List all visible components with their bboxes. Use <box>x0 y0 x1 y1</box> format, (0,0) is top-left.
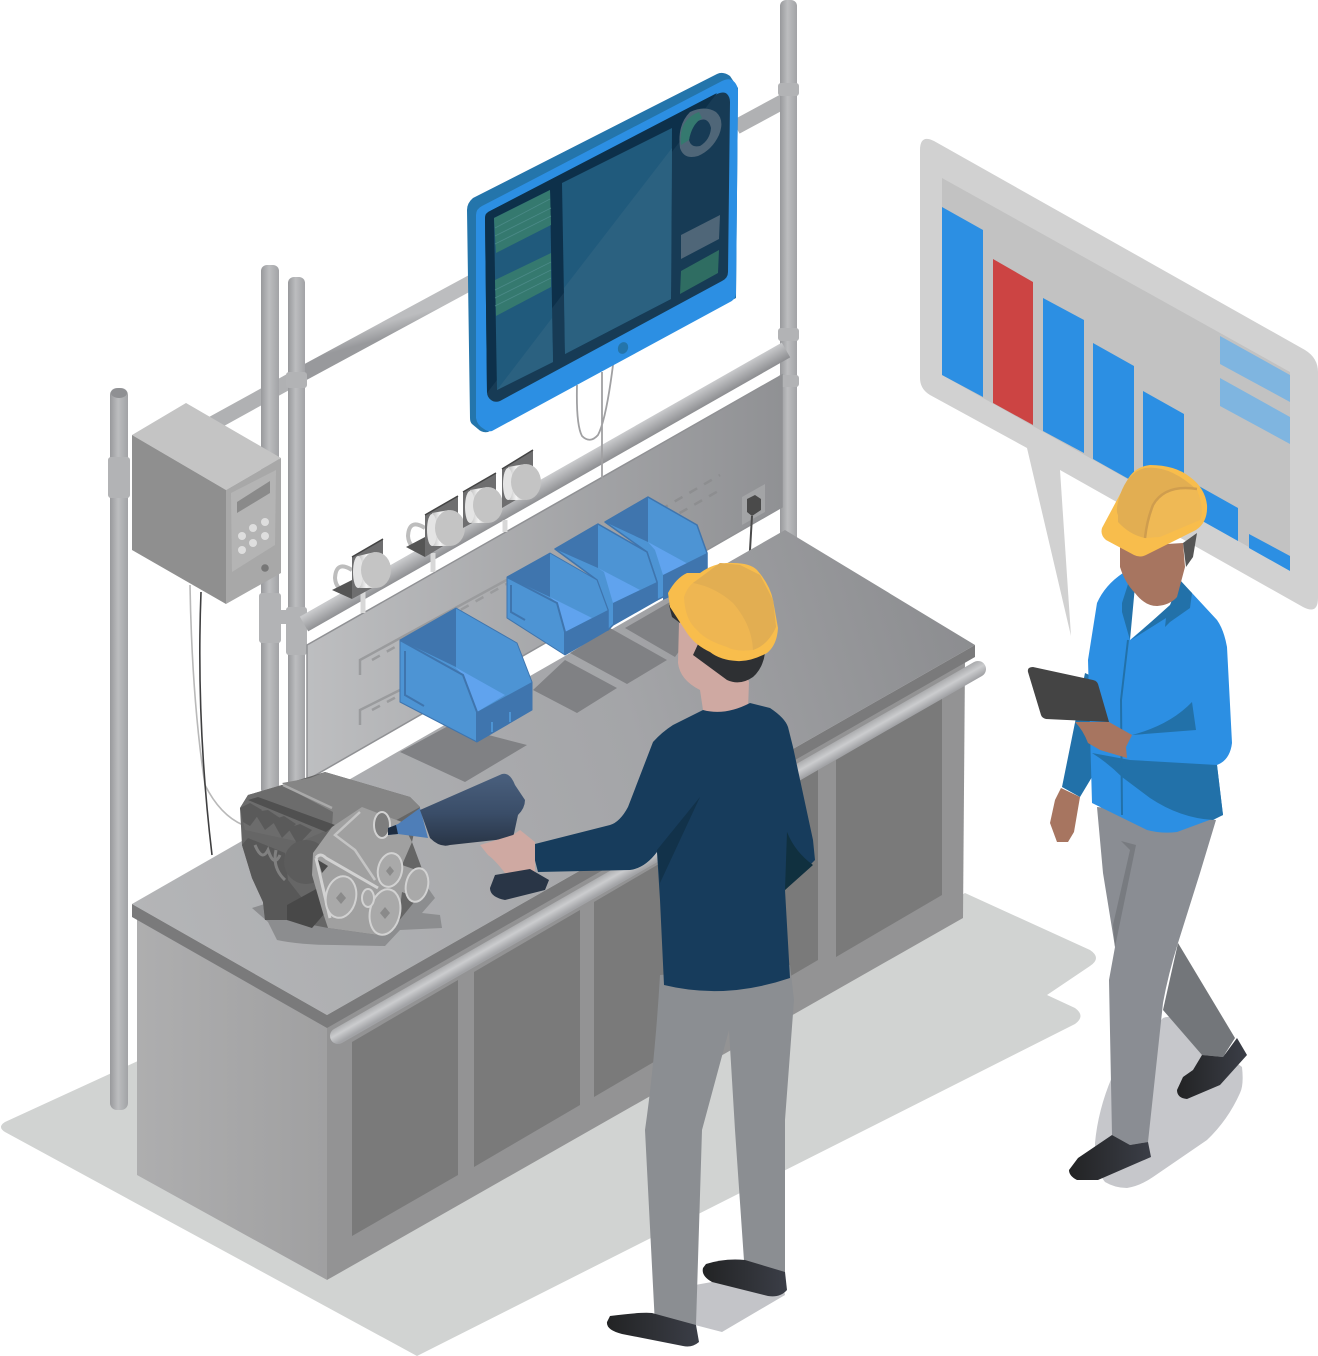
engine dark stripe <box>248 797 335 832</box>
bin 3 <box>555 524 657 630</box>
engine shadow <box>252 880 442 946</box>
engine block <box>240 772 442 946</box>
jacket seam <box>1121 640 1128 815</box>
engine dark recess <box>318 860 328 873</box>
floor shadow <box>1 893 1096 1356</box>
head <box>1120 543 1185 606</box>
neck and head <box>678 622 749 714</box>
torso <box>531 703 815 991</box>
box left face <box>132 435 226 604</box>
bin 1 <box>400 608 532 742</box>
screen: left column <box>494 190 553 390</box>
keypad panel <box>231 470 276 572</box>
legend swatch 1 <box>1220 336 1290 402</box>
jacket <box>1088 573 1232 833</box>
engine highlight bar <box>283 785 332 808</box>
bar: blue 1 <box>942 207 983 397</box>
shoe front <box>607 1313 699 1346</box>
instrument 2 <box>406 496 465 557</box>
cabinet door 4 <box>712 770 818 1022</box>
pulley hubs <box>336 866 394 919</box>
torso shade arm <box>657 797 700 883</box>
shelf pipe <box>304 350 786 624</box>
screen: left column highlight <box>497 318 553 390</box>
screen: green block 1 <box>494 190 551 253</box>
engine back cover <box>282 772 420 840</box>
shoe front <box>1069 1135 1151 1180</box>
box top <box>132 403 281 490</box>
bar: red <box>993 259 1033 425</box>
shoe rear <box>1177 1038 1247 1099</box>
cabinet door 5 <box>836 698 942 957</box>
speech panel: performance dashboard <box>920 139 1318 636</box>
hair <box>669 605 765 682</box>
engine belt <box>316 855 378 918</box>
collar <box>1122 578 1192 640</box>
scanner <box>388 774 549 900</box>
engine coil row <box>240 803 312 845</box>
screen: main panel highlight <box>564 148 672 354</box>
box right face <box>226 458 281 604</box>
scanner body <box>420 774 525 846</box>
instruments on shelf <box>332 450 541 613</box>
wall outlet and plug <box>742 484 765 566</box>
shirt <box>1128 586 1177 640</box>
engine silhouette <box>240 772 428 935</box>
bench left face <box>137 918 327 1280</box>
instrument 3 <box>463 473 503 528</box>
hair <box>1183 533 1197 567</box>
cabinet door 3 <box>594 840 700 1097</box>
legend swatch 2 <box>1220 378 1290 444</box>
bin 4 <box>605 497 707 600</box>
feet shadow <box>695 1270 785 1332</box>
feet shadow <box>1095 1017 1243 1188</box>
engine intake manifold <box>242 838 302 920</box>
front rail <box>338 669 978 1036</box>
shelf supports <box>363 520 505 613</box>
monitor casing front <box>476 79 738 431</box>
rear leg <box>1163 943 1235 1057</box>
panel dashed guides <box>360 475 720 725</box>
frame: back vertical pipes <box>259 0 799 797</box>
jacket shade <box>1092 753 1223 820</box>
screen: grey tile <box>681 215 720 259</box>
screen: main panel <box>562 128 672 354</box>
hard hat <box>1102 465 1207 556</box>
screen: gauge ring <box>679 108 721 157</box>
hand <box>480 830 535 873</box>
instrument 1 <box>332 539 391 599</box>
engine front face <box>312 807 428 935</box>
tablet <box>1028 667 1109 722</box>
upper hand <box>1075 722 1132 758</box>
cabinet door 1 <box>352 980 458 1236</box>
bezel dark reflection <box>485 93 717 393</box>
lower hand <box>1050 788 1080 842</box>
bar: blue 3 <box>1043 298 1084 453</box>
bench top <box>132 530 975 1015</box>
front leg <box>1097 807 1216 1145</box>
electrical control box <box>132 403 281 604</box>
engine lower block <box>287 888 325 928</box>
bar: blue 7 <box>1249 534 1290 571</box>
hard hat <box>668 563 778 661</box>
screen: green tile <box>680 250 719 294</box>
bin shadows on bench <box>400 602 700 782</box>
trouser crease <box>1113 841 1136 947</box>
legs <box>645 965 794 1325</box>
engine pulleys <box>322 812 431 938</box>
frame: front-left vertical pipe <box>108 388 130 1110</box>
scanner tip <box>388 808 428 838</box>
back panel <box>307 375 782 780</box>
frame: upper diagonal pipes <box>212 100 786 424</box>
screen: green block 2 <box>495 253 551 316</box>
control box cables <box>190 585 243 825</box>
storage bins <box>400 497 707 742</box>
bench top edge <box>132 645 975 1028</box>
engine flywheel housing <box>284 840 328 884</box>
bin 2 <box>507 553 608 655</box>
monitor casing side <box>467 73 738 432</box>
monitor bezel <box>485 92 730 402</box>
left sleeve <box>1062 673 1100 797</box>
person 2: supervisor with tablet <box>1028 465 1247 1188</box>
bar: blue 4 <box>1093 343 1134 482</box>
arm fold <box>1132 702 1196 735</box>
grip base <box>490 869 549 900</box>
person 1: technician with scanner <box>388 563 815 1346</box>
monitor <box>467 73 738 432</box>
cabinet door 2 <box>474 910 580 1167</box>
workbench <box>132 530 978 1280</box>
engine valve cover <box>240 785 333 842</box>
instrument 4 <box>502 450 541 508</box>
torso shade side <box>785 832 813 890</box>
monitor power button <box>616 340 630 356</box>
bar: blue 6 <box>1197 485 1238 541</box>
bar: blue 5 <box>1143 391 1184 510</box>
intake runners <box>255 845 285 880</box>
bench front face <box>327 660 965 1280</box>
shoe rear <box>703 1260 787 1296</box>
monitor cables <box>577 365 613 478</box>
